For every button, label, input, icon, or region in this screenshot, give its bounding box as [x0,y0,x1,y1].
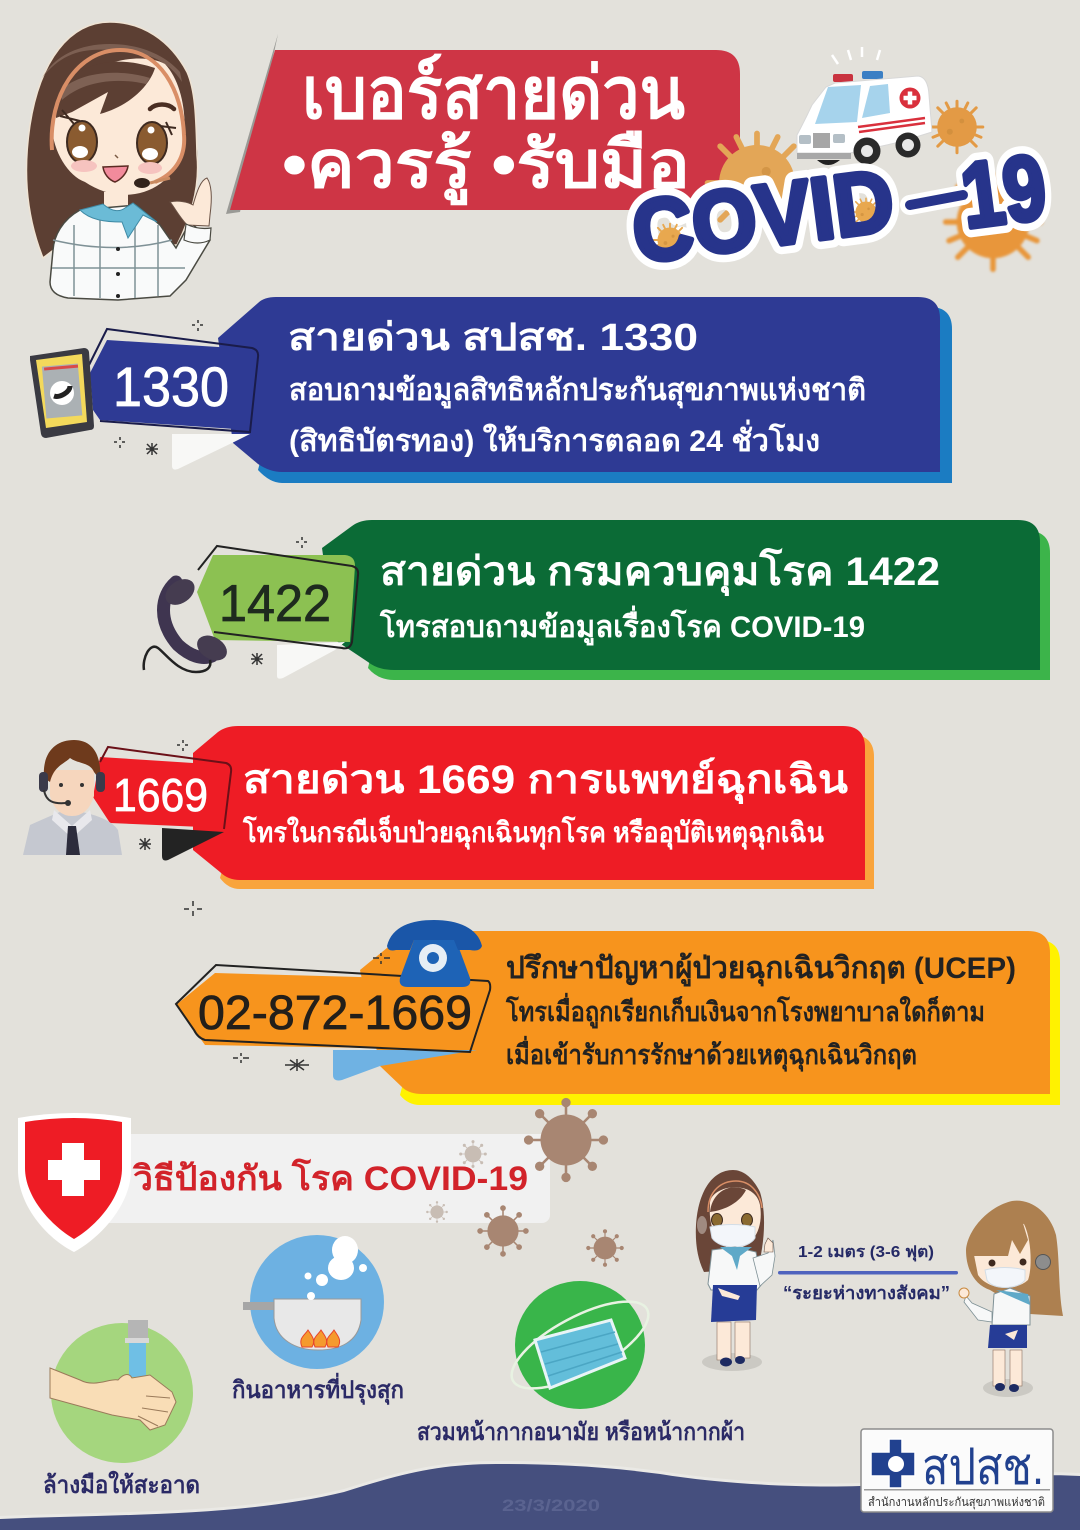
speech tail [277,642,345,679]
speech tail [172,434,250,470]
number tag 1422: 1422 [219,575,331,633]
COVID-19 wordmark: COVID [627,150,899,282]
decorative viruses [426,1099,623,1266]
footer wave [0,1461,1080,1530]
icon: shield with cross [18,1113,131,1252]
date stamp: 23/3/2020 [502,1496,600,1515]
sparkles [114,320,390,1071]
illustration: woman with mask, right [959,1201,1063,1397]
speech tail [333,1050,477,1080]
panel: hotline 1669 [23,726,874,889]
icon: rotary telephone [387,920,482,987]
logo wordmark: สปสช. [922,1439,1044,1495]
viruses near title [708,101,1040,269]
character: girl with headset [26,22,211,300]
distance label: 1-2 เมตร (3-6 ฟุต) [798,1244,934,1262]
number tag 1669 [93,747,231,829]
COVID-19 wordmark: 19 [955,136,1052,248]
speech tail [162,828,224,860]
icon: smartphone [30,348,94,438]
illustration: woman with mask, left [696,1170,775,1371]
title banner [226,34,740,214]
number tag 1669: 1669 [113,769,208,821]
panel: hotline 1330 [30,297,952,483]
banner: prevention heading [18,1113,550,1252]
icon: washing hands [50,1320,193,1463]
panel: UCEP hotline [176,920,1060,1105]
distance line [778,1271,958,1274]
heading UCEP: ปรึกษาปัญหาผู้ป่วยฉุกเฉินวิกฤต (UCEP) [506,952,1016,987]
description line 1: สอบถามข้อมูลสิทธิหลักประกันสุขภาพแห่งชาติ [289,374,866,409]
heading 1422: สายด่วน กรมควบคุมโรค 1422 [380,548,940,597]
number tag 1422 [197,546,358,648]
heading 1669: สายด่วน 1669 การแพทย์ฉุกเฉิน [243,757,848,805]
number tag 1330: 1330 [113,355,229,418]
description line 1: โทรเมื่อถูกเรียกเก็บเงินจากโรงพยาบาลใดก็ตาม [505,992,985,1029]
number tag 1330 [89,329,258,432]
COVID-19 wordmark: COVID [627,150,899,282]
description 1669: โทรในกรณีเจ็บป่วยฉุกเฉินทุกโรค หรืออุบัติเหตุฉุกเฉิน [242,815,824,850]
label: cooked food: กินอาหารที่ปรุงสุก [232,1372,404,1406]
logo caption: สำนักงานหลักประกันสุขภาพแห่งชาติ [868,1495,1045,1510]
panel: hotline 1422 [144,520,1050,680]
title line 1: เบอร์สายด่วน [302,53,685,134]
icon: cooking pot [243,1235,384,1369]
COVID-19 wordmark: 19 [955,136,1052,248]
title line 2: •ควรรู้ •รับมือ [282,127,690,206]
prevention title: วิธีป้องกัน โรค COVID-19 [132,1158,528,1198]
heading 1330: สายด่วน สปสช. 1330 [288,317,698,359]
logo: NHSO [861,1429,1053,1512]
social distancing label: “ระยะห่างทางสังคม” [783,1283,950,1303]
number tag 02-872-1669 [176,965,490,1052]
icon: ambulance [797,47,932,165]
icon: telephone handset [144,574,231,672]
icon: face mask [500,1281,660,1409]
description 1422: โทรสอบถามข้อมูลเรื่องโรค COVID-19 [379,605,865,646]
COVID-19 wordmark [627,136,1052,282]
number tag 02-872-1669: 02-872-1669 [198,987,472,1040]
label: wash hands: ล้างมือให้สะอาด [43,1470,200,1499]
description line 2: เมื่อเข้ารับการรักษาด้วยเหตุฉุกเฉินวิกฤต [506,1035,917,1072]
icon: call-centre man [23,740,122,855]
label: wear mask: สวมหน้ากากอนามัย หรือหน้ากากผ้า [417,1419,745,1446]
description line 2: (สิทธิบัตรทอง) ให้บริการตลอด 24 ชั่วโมง [289,419,820,458]
